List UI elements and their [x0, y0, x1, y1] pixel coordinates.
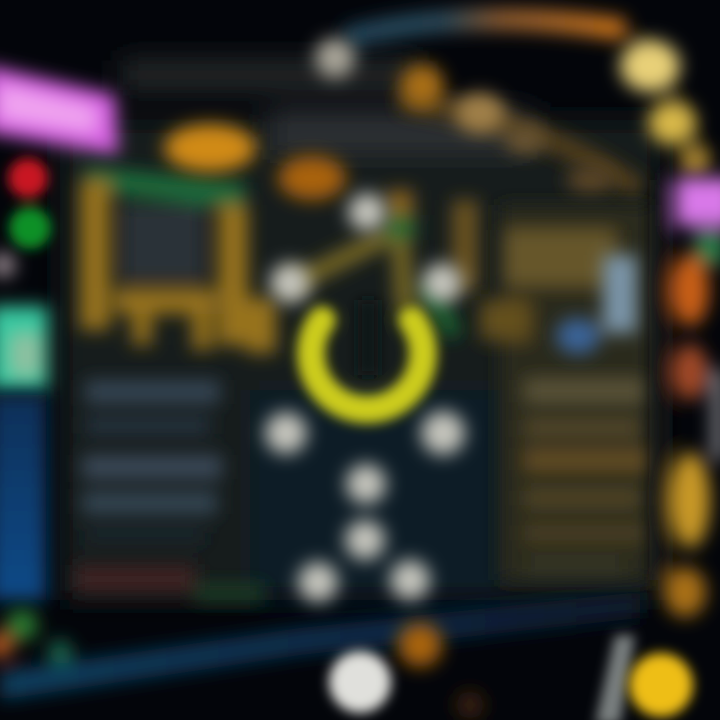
bottom grey strip: [595, 635, 635, 720]
panel: left chart frame: [80, 166, 276, 353]
icon: bottom orange dot: [398, 623, 484, 719]
panel: right edge strip: [655, 178, 720, 617]
panel: top arc: [345, 19, 700, 190]
heading: pink banner: [0, 65, 118, 155]
icon: top beads: [315, 38, 710, 194]
icon: white nodes: [265, 193, 465, 602]
icon: orange labels: [164, 124, 346, 200]
panel: left mint block: [0, 253, 48, 390]
icon: right blue shapes: [556, 255, 637, 354]
panel: left text rows: [75, 380, 265, 601]
green header bar: [85, 166, 245, 210]
chart: yellow ring gauge: [311, 300, 423, 409]
panel: left blue column: [0, 395, 46, 600]
inner grey panel: [122, 205, 204, 280]
icon: bright yellow circle: [629, 653, 693, 717]
tan frame: [80, 180, 276, 353]
icon: red and green lights: [8, 158, 51, 249]
panel: central branches: [290, 190, 465, 335]
panel: central board: [60, 60, 660, 600]
bottom band: [0, 592, 640, 700]
icon: large white circle: [329, 651, 391, 713]
panel: right text rows: [480, 205, 650, 580]
